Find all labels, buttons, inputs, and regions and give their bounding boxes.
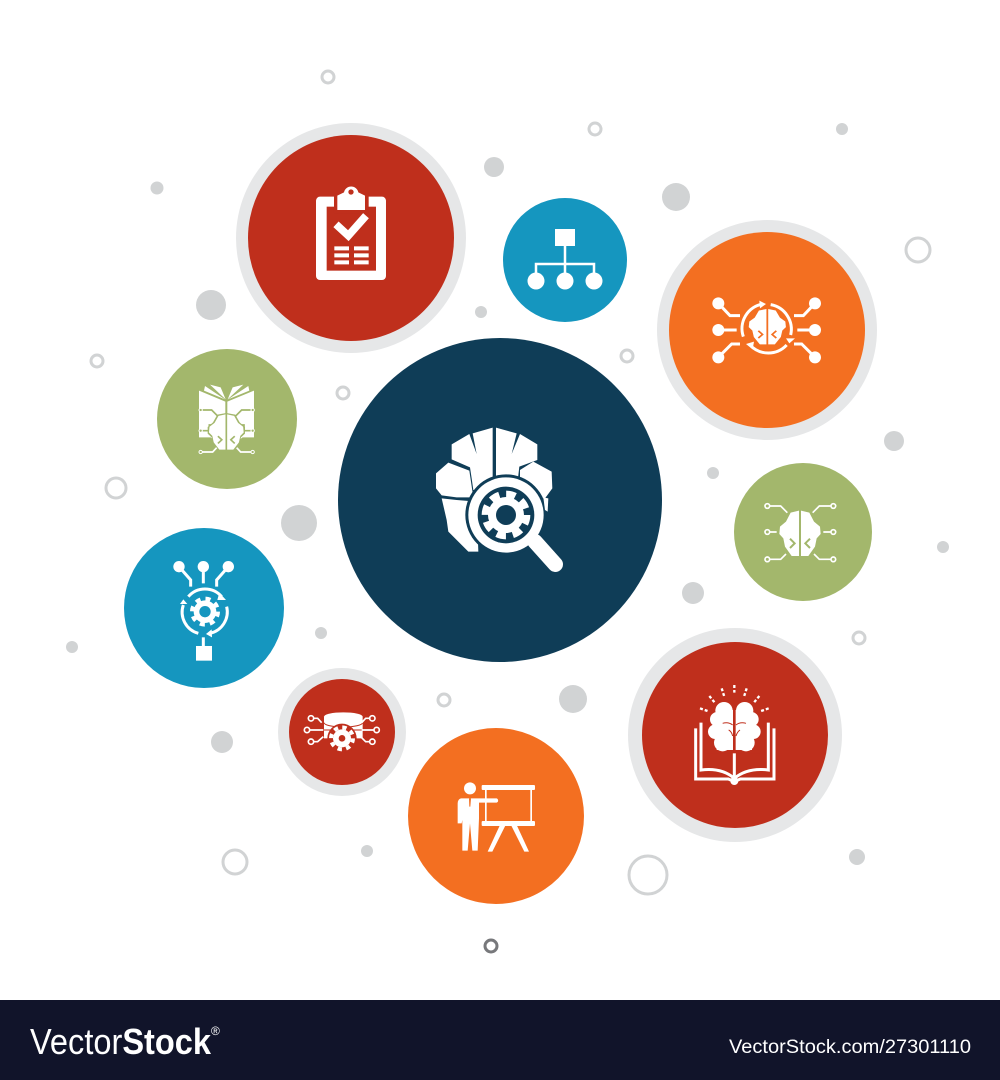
panel: small blue bubble with hierarchy — [503, 198, 627, 322]
icon: brain with cycle arrows and nodes — [712, 297, 821, 363]
panel: right orange bubble with brain cycle — [657, 220, 877, 440]
icon: org chart — [528, 229, 602, 290]
panel: left blue bubble with gear cycle — [124, 528, 284, 688]
panel: small red bubble with database gear — [278, 668, 406, 796]
icon: presenter at board — [458, 782, 535, 852]
background dots — [66, 71, 949, 952]
icon: brain with gear under magnifier — [436, 428, 555, 564]
icon: open book with brain — [199, 385, 254, 454]
icon: database with gear and circuits — [304, 712, 379, 753]
logo text: VectorStock — [30, 1021, 212, 1062]
panel: left green bubble with book and brain — [157, 349, 297, 489]
icon: brain with circuit connections — [765, 504, 836, 562]
panel: bottom orange bubble with presenter — [408, 728, 584, 904]
icon: open book with glowing brain — [696, 685, 774, 785]
icon: clipboard checklist — [316, 187, 386, 280]
icon: gear with arrows, nodes and box — [173, 561, 234, 661]
panel: right red bubble with book and glowing brain — [628, 628, 842, 842]
panel: top red bubble with clipboard — [236, 123, 466, 353]
footer bar — [0, 1000, 1000, 1080]
panel: right green bubble with brain network — [734, 463, 872, 601]
image id text: VectorStock.com/27301110 — [729, 1037, 971, 1058]
panel: central bubble with brain and magnifier — [338, 338, 662, 662]
registered mark: ® — [211, 1024, 220, 1038]
